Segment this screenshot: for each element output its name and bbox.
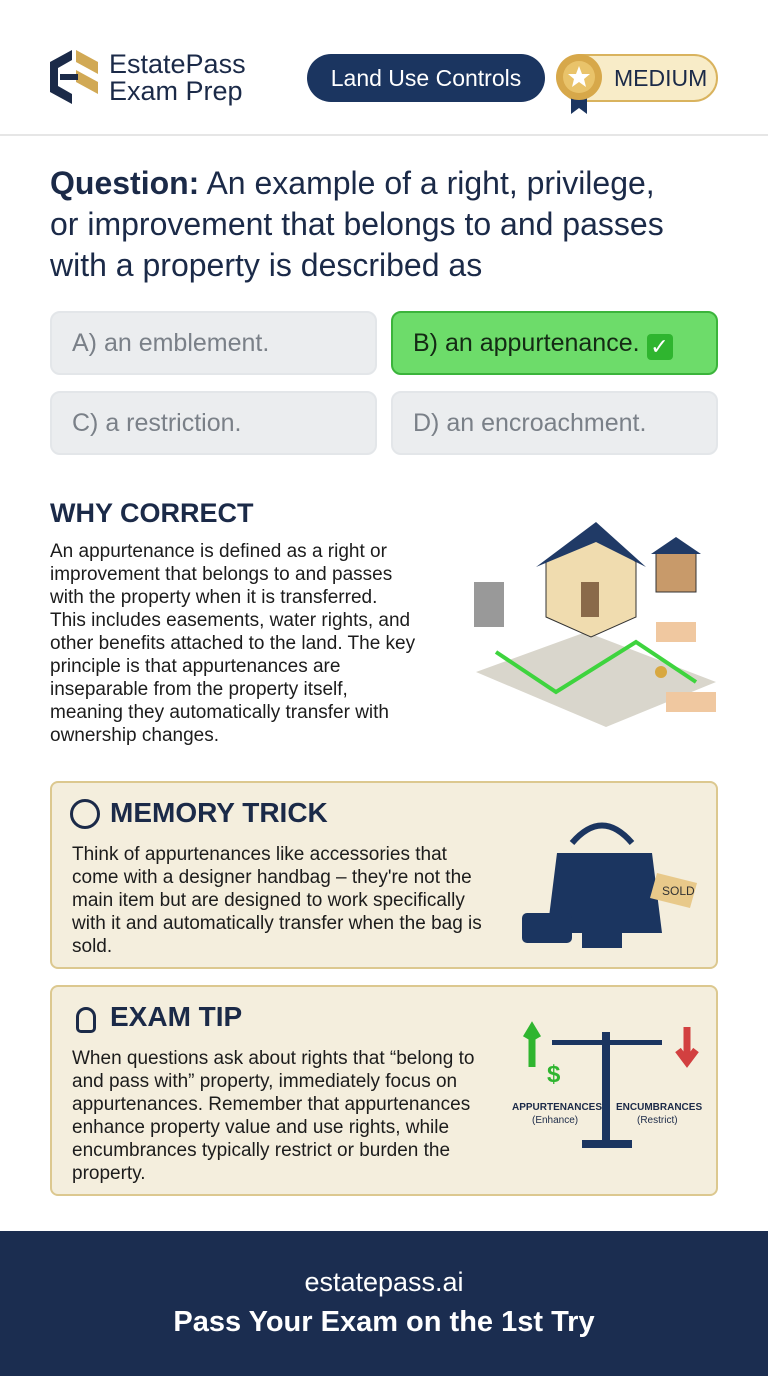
memory trick card: MEMORY TRICK <box>110 797 328 828</box>
footer <box>0 1231 768 1376</box>
options <box>50 311 718 455</box>
options: C) a restriction. <box>72 409 241 437</box>
logo text: EstatePass <box>109 49 246 79</box>
illustration: balance scale <box>512 1021 702 1148</box>
illustration: handbag: SOLD <box>662 884 695 898</box>
why correct text: This includes easements, water rights, and <box>50 610 410 631</box>
options: ✓ <box>650 334 669 359</box>
why correct text: ownership changes. <box>50 725 219 746</box>
why correct text: improvement that belongs to and passes <box>50 564 392 585</box>
question: or improvement that belongs to and passes <box>50 206 664 242</box>
options: B) an appurtenance. <box>413 329 640 357</box>
illustration: balance scale: APPURTENANCES <box>512 1102 602 1113</box>
illustration: handbag <box>522 822 697 948</box>
why correct text: meaning they automatically transfer with <box>50 702 389 723</box>
why correct text: An appurtenance is defined as a right or <box>50 541 387 562</box>
memory trick card: Think of appurtenances like accessories that come with a designer handbag – they're not the main item but are designed to work specifically with it and automatically transfer when the bag is sold. <box>72 844 482 957</box>
illustration: balance scale: (Enhance) <box>532 1115 578 1126</box>
options: A) an emblement. <box>72 329 269 357</box>
illustration: balance scale: ENCUMBRANCES <box>616 1102 702 1113</box>
logo text <box>109 49 246 106</box>
question <box>50 165 664 283</box>
question: with a property is described as <box>50 247 482 283</box>
footer: estatepass.ai <box>304 1267 464 1297</box>
exam tip card <box>50 985 718 1196</box>
question: Question: An example of a right, privilege, <box>50 165 655 201</box>
exam tip card: EXAM TIP <box>110 1001 242 1032</box>
difficulty badge: MEDIUM <box>614 65 707 91</box>
topic pill: Land Use Controls <box>331 65 521 91</box>
why correct text: inseparable from the property itself, <box>50 679 348 700</box>
options: D) an encroachment. <box>413 409 646 437</box>
exam tip card: When questions ask about rights that “belong to and pass with” property, immediately focus on appurtenances. Remember that appurtenances enhance property value and use rights, while encumbrances typically restrict or burden the property. <box>72 1048 474 1184</box>
why correct text: with the property when it is transferred. <box>50 587 377 608</box>
logo icon <box>50 50 98 104</box>
medal icon <box>556 54 602 114</box>
footer: Pass Your Exam on the 1st Try <box>173 1306 595 1338</box>
difficulty badge <box>558 54 718 102</box>
why correct heading: WHY CORRECT <box>50 498 254 528</box>
illustration: balance scale: (Restrict) <box>637 1115 678 1126</box>
why correct text <box>50 541 415 746</box>
topic pill <box>307 54 545 102</box>
icon: brain <box>70 799 100 829</box>
illustration: balance scale: $ <box>547 1061 561 1088</box>
why correct text: other benefits attached to the land. The key <box>50 633 415 654</box>
icon: lightbulb <box>76 1007 96 1033</box>
logo text: Exam Prep <box>109 76 243 106</box>
memory trick card <box>50 781 718 969</box>
why correct text: principle is that appurtenances are <box>50 656 340 677</box>
header <box>0 0 768 136</box>
illustration: house <box>474 522 716 727</box>
